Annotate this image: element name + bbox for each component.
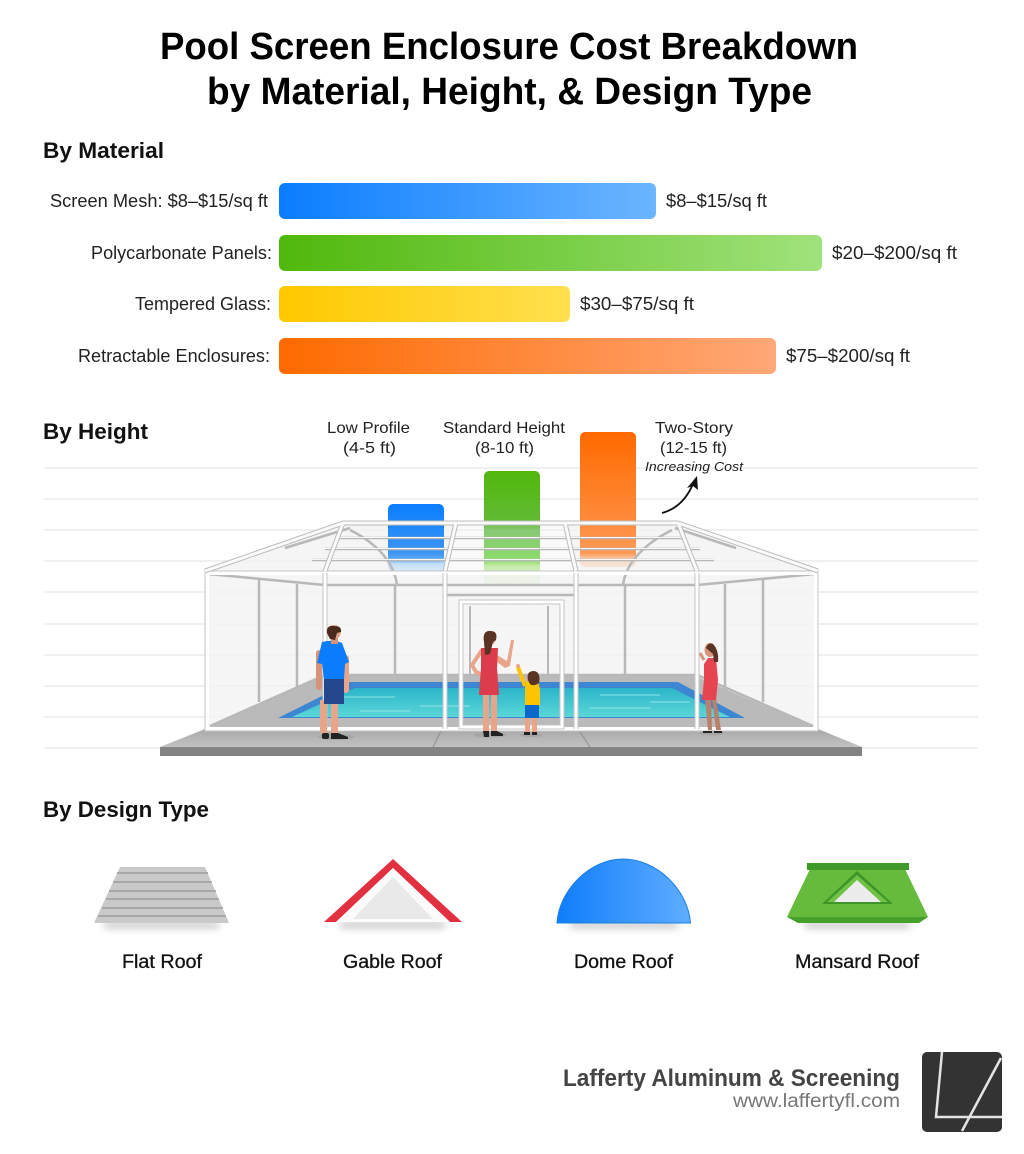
roof panels <box>205 523 818 571</box>
icon: gable roof <box>324 859 462 928</box>
label: low profile <box>327 420 410 457</box>
screen walls <box>207 573 816 728</box>
icon: mansard roof <box>787 863 928 928</box>
person: man in blue shirt <box>316 625 354 740</box>
title: Pool Screen Enclosure Cost Breakdown <box>160 26 858 68</box>
pool deck <box>210 676 813 727</box>
bar row: polycarbonate panels: $20–$200/sq ft <box>832 243 957 263</box>
person: child in yellow shirt <box>516 664 542 737</box>
person: woman in red dress <box>472 631 514 738</box>
bar row: tempered glass <box>135 286 694 322</box>
label: increasing cost: Increasing Cost <box>645 459 744 474</box>
heading: by material: By Material <box>43 138 164 163</box>
person: woman at right <box>700 643 724 736</box>
bar row: retractable enclosures <box>78 338 910 374</box>
bar: standard height <box>484 471 540 585</box>
bar row: polycarbonate panels: Polycarbonate Panels: <box>91 243 272 263</box>
concrete slab <box>160 729 862 756</box>
bar: low profile <box>388 504 444 572</box>
label: standard height <box>443 420 566 457</box>
heading: by height: By Height <box>43 419 149 444</box>
bar row: tempered glass: Tempered Glass: <box>135 294 271 314</box>
icon: flat roof <box>94 867 229 928</box>
title: by Material, Height, & Design Type <box>207 71 812 113</box>
bar row: screen mesh: $8–$15/sq ft <box>666 191 767 211</box>
panel: by height <box>43 419 978 756</box>
bar row: screen mesh: Screen Mesh: $8–$15/sq ft <box>50 191 268 211</box>
icon: logo <box>922 1052 1002 1132</box>
label: flat roof: Flat Roof <box>122 952 203 973</box>
heading: by design type: By Design Type <box>43 797 209 822</box>
bar row: screen mesh <box>50 183 767 219</box>
company name: Lafferty Aluminum & Screening <box>563 1065 900 1092</box>
brand footer <box>563 1052 1002 1132</box>
arrow: increasing cost <box>662 476 698 513</box>
panel: by material <box>43 138 957 374</box>
label: low profile: Low Profile <box>327 420 410 437</box>
website: www.laffertyfl.com <box>732 1091 900 1112</box>
label: two-story: (12-15 ft) <box>660 440 727 457</box>
label: standard height: Standard Height <box>443 420 566 437</box>
enclosure frame <box>205 523 818 731</box>
swimming pool <box>278 682 745 718</box>
label: low profile: (4-5 ft) <box>343 440 396 457</box>
bar row: retractable enclosures: $75–$200/sq ft <box>786 346 910 366</box>
label: two-story <box>655 420 733 457</box>
bar row: tempered glass: $30–$75/sq ft <box>580 294 694 314</box>
icon: dome roof <box>557 859 690 928</box>
label: two-story: Two-Story <box>655 420 733 437</box>
panel: by design type <box>43 797 928 973</box>
bar row: retractable enclosures: Retractable Enclosures: <box>78 346 270 366</box>
label: mansard roof: Mansard Roof <box>795 952 920 973</box>
label: dome roof: Dome Roof <box>574 952 674 973</box>
label: gable roof: Gable Roof <box>343 952 443 973</box>
label: standard height: (8-10 ft) <box>475 440 534 457</box>
bar: two-story <box>580 432 636 567</box>
title <box>160 26 858 113</box>
bar row: polycarbonate panels <box>91 235 957 271</box>
illustration: pool enclosure <box>160 523 862 756</box>
